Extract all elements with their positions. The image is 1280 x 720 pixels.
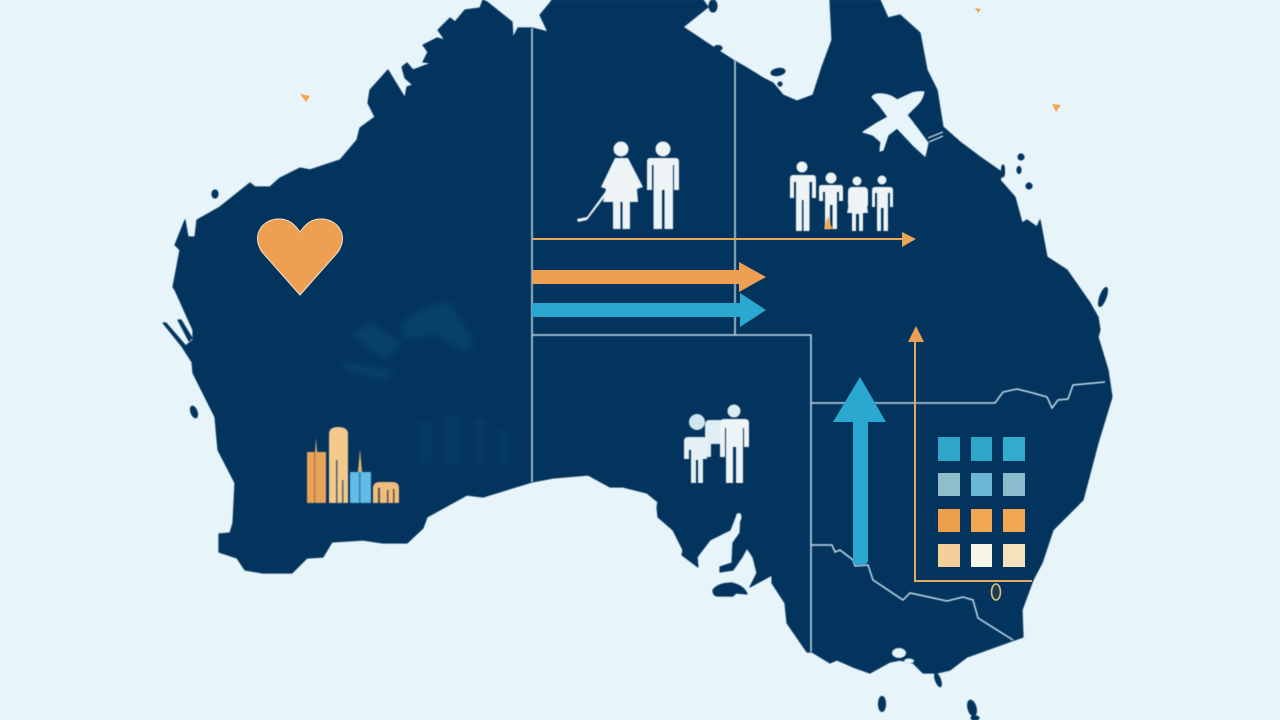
- thick blue arrow: [532, 293, 766, 327]
- orange mark on family figure: [824, 216, 834, 229]
- thick blue up arrow: [833, 377, 886, 565]
- icon: heart: [257, 219, 343, 295]
- chart axes: orange: [908, 326, 1032, 581]
- faint ghost plane: [340, 302, 475, 380]
- icon: city skyline: [307, 427, 399, 503]
- icon: couple with cane: [577, 142, 679, 229]
- grid of coloured squares: [938, 437, 1025, 567]
- thin orange arrow: [532, 232, 916, 247]
- icon: airplane: [863, 92, 943, 156]
- small orange markers: [300, 8, 1061, 112]
- state borders: [532, 28, 1105, 652]
- thick orange arrow: [532, 262, 766, 292]
- faint ghost people: [418, 415, 509, 465]
- bay islands: [736, 513, 914, 664]
- map: Australia mainland and islands: [163, 0, 1112, 720]
- icon: family of four: [790, 162, 893, 231]
- map pin marker: [992, 584, 1000, 600]
- icon: adult and child: [684, 404, 749, 483]
